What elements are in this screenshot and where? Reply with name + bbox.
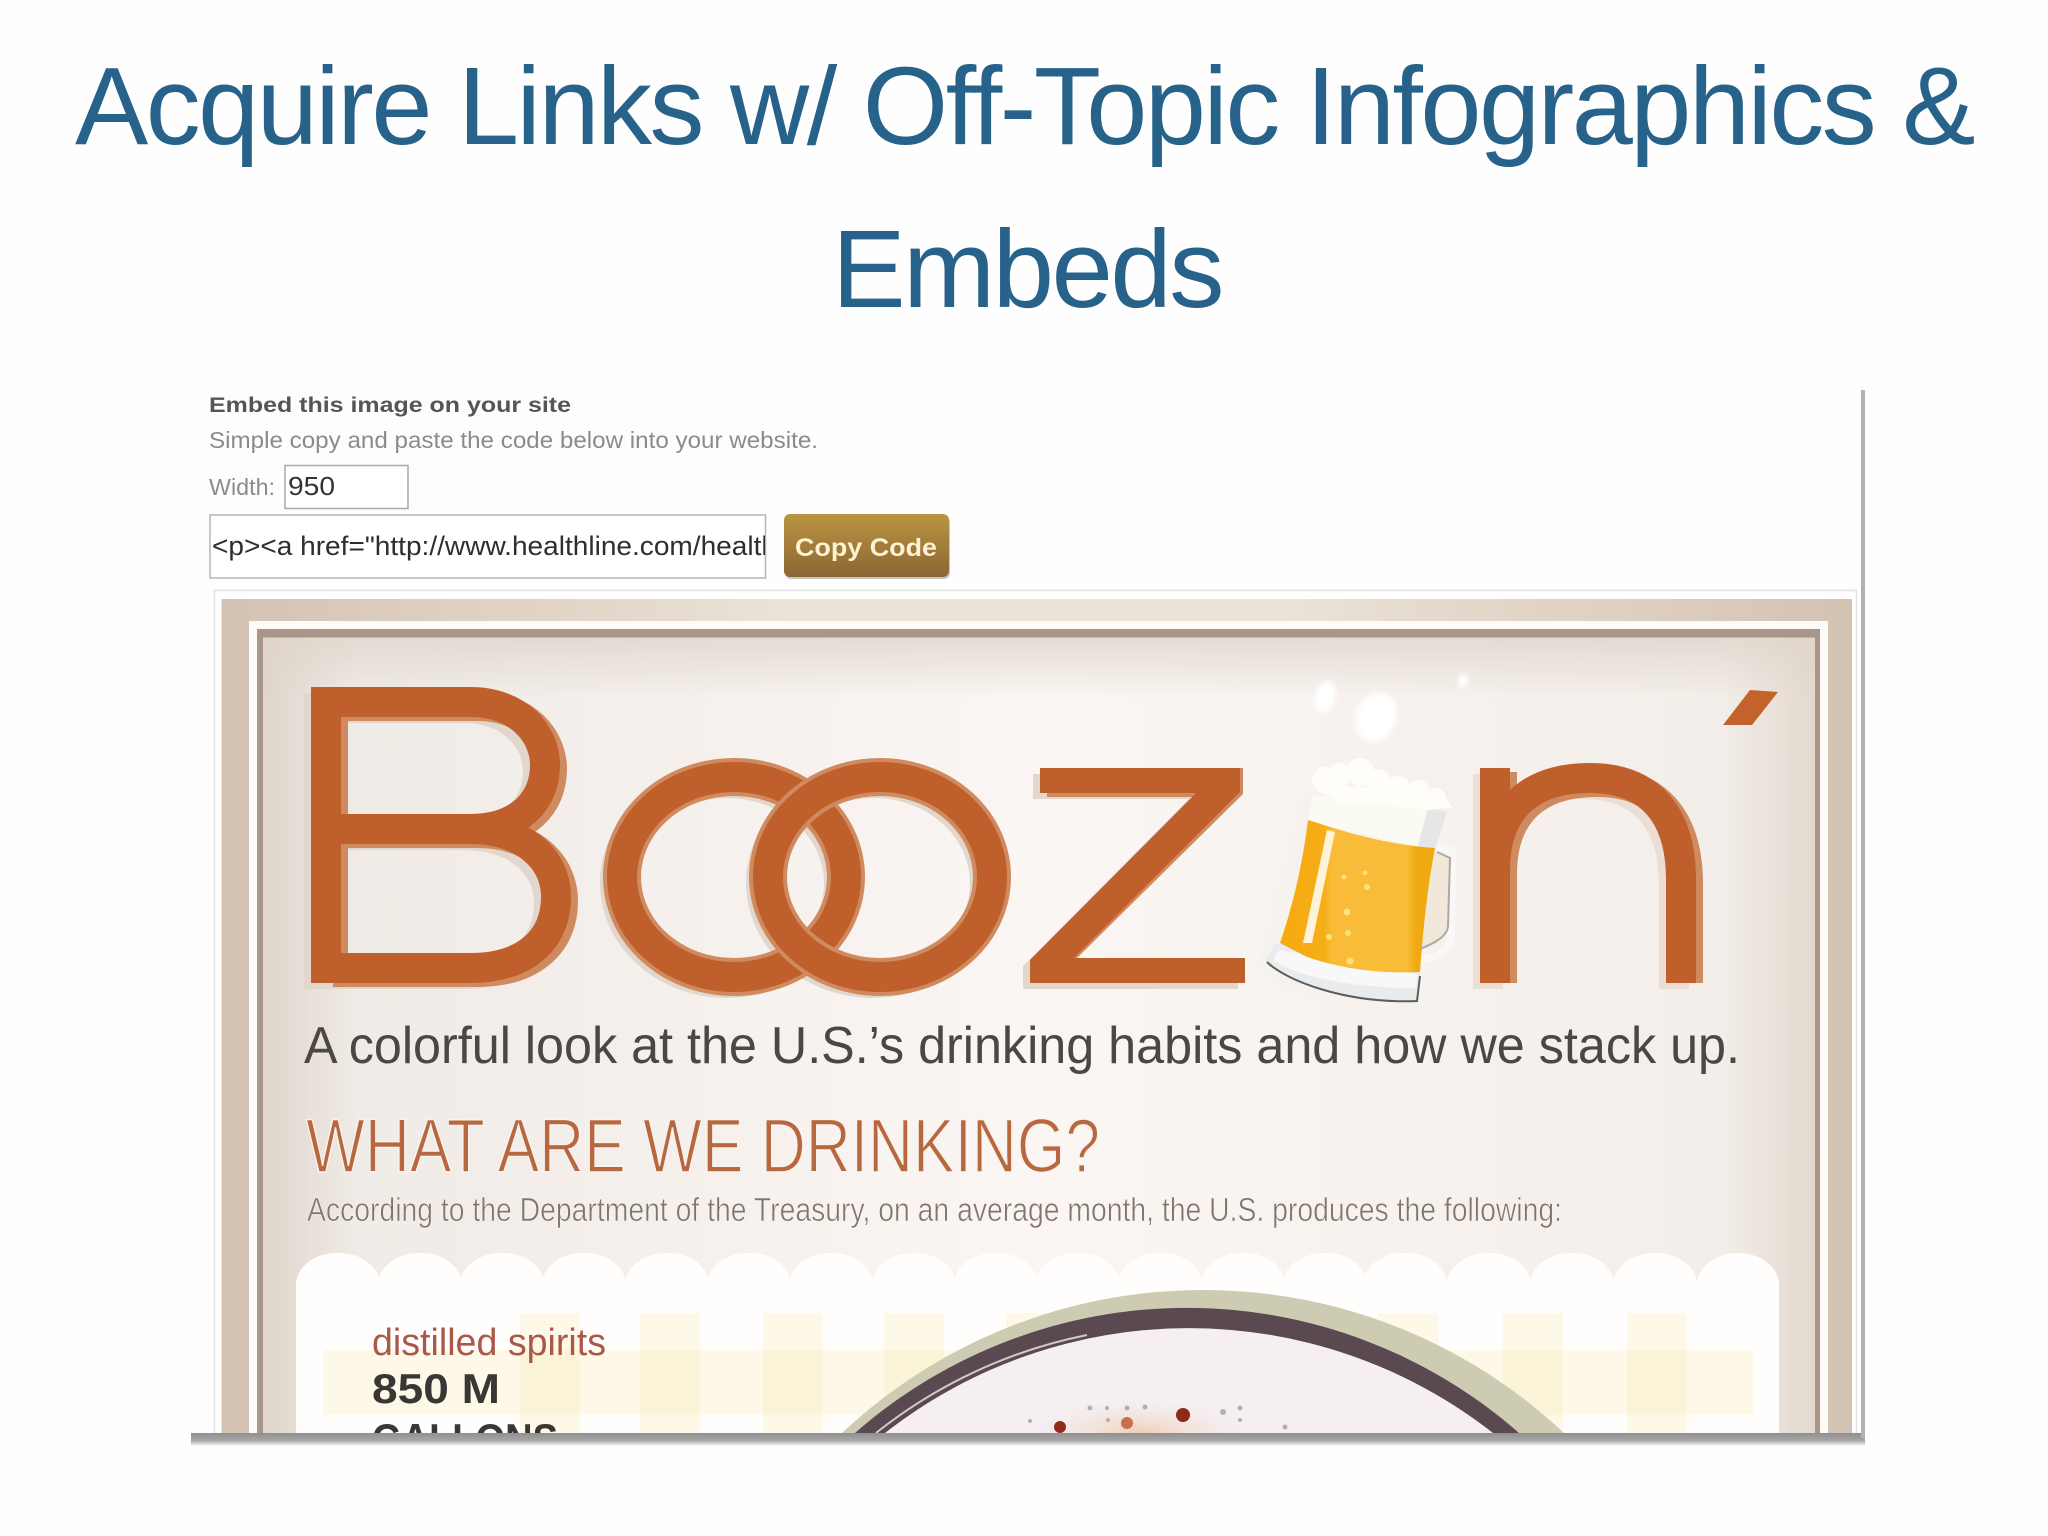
mug base bbox=[1265, 943, 1420, 1001]
title: Embeds bbox=[832, 208, 1222, 331]
width label: Width: bbox=[209, 474, 275, 500]
width input: 950 bbox=[288, 471, 335, 501]
stat: distilled spirits bbox=[374, 1328, 605, 1433]
mug halo bbox=[1257, 797, 1464, 1012]
gingham tablecloth bbox=[323, 1313, 1753, 1433]
copy code button: Copy Code bbox=[795, 534, 937, 562]
subtitle: A colorful look at the U.S.’s drinking habits and how we stack up. bbox=[304, 1017, 1740, 1075]
beer bbox=[1280, 820, 1435, 972]
section intro: According to the Department of the Treasury, on an average month, the U.S. produces the following: bbox=[307, 1191, 1562, 1228]
letter shadows bbox=[319, 693, 1674, 989]
bowl illustration bbox=[842, 1290, 1564, 1433]
speckles bbox=[1028, 1404, 1288, 1433]
code input bbox=[210, 515, 777, 578]
icon: beer mug bbox=[1257, 674, 1468, 1012]
stat: distilled spirits: 850 M bbox=[372, 1365, 500, 1412]
title: Acquire Links w/ Off-Topic Infographics & bbox=[75, 45, 1974, 168]
embed instructions: Simple copy and paste the code below into your website. bbox=[209, 427, 818, 453]
infographic preview bbox=[214, 590, 1856, 1471]
letters bbox=[326, 687, 1681, 983]
copy code button bbox=[784, 514, 950, 579]
mug handle bbox=[1417, 847, 1453, 960]
bubbles bbox=[1326, 870, 1370, 964]
Boozin wordmark bbox=[319, 687, 1778, 989]
code input: <p><a href="http://www.healthline.com/health bbox=[212, 531, 777, 561]
panel: embed screenshot bbox=[191, 387, 1865, 1471]
letter highlights bbox=[333, 691, 1688, 983]
stat: distilled spirits: GALLONS bbox=[372, 1415, 558, 1462]
picket fence bbox=[296, 1253, 1779, 1433]
title bbox=[75, 45, 1974, 331]
stat: distilled spirits: distilled spirits bbox=[372, 1322, 606, 1364]
embed heading: Embed this image on your site bbox=[209, 394, 571, 417]
foam bbox=[1312, 758, 1453, 810]
section heading: WHAT ARE WE DRINKING? bbox=[306, 1104, 1100, 1189]
mug glass bbox=[1312, 795, 1427, 812]
apostrophe bbox=[1723, 690, 1778, 725]
width input bbox=[285, 466, 408, 508]
steam drops bbox=[1314, 674, 1469, 741]
